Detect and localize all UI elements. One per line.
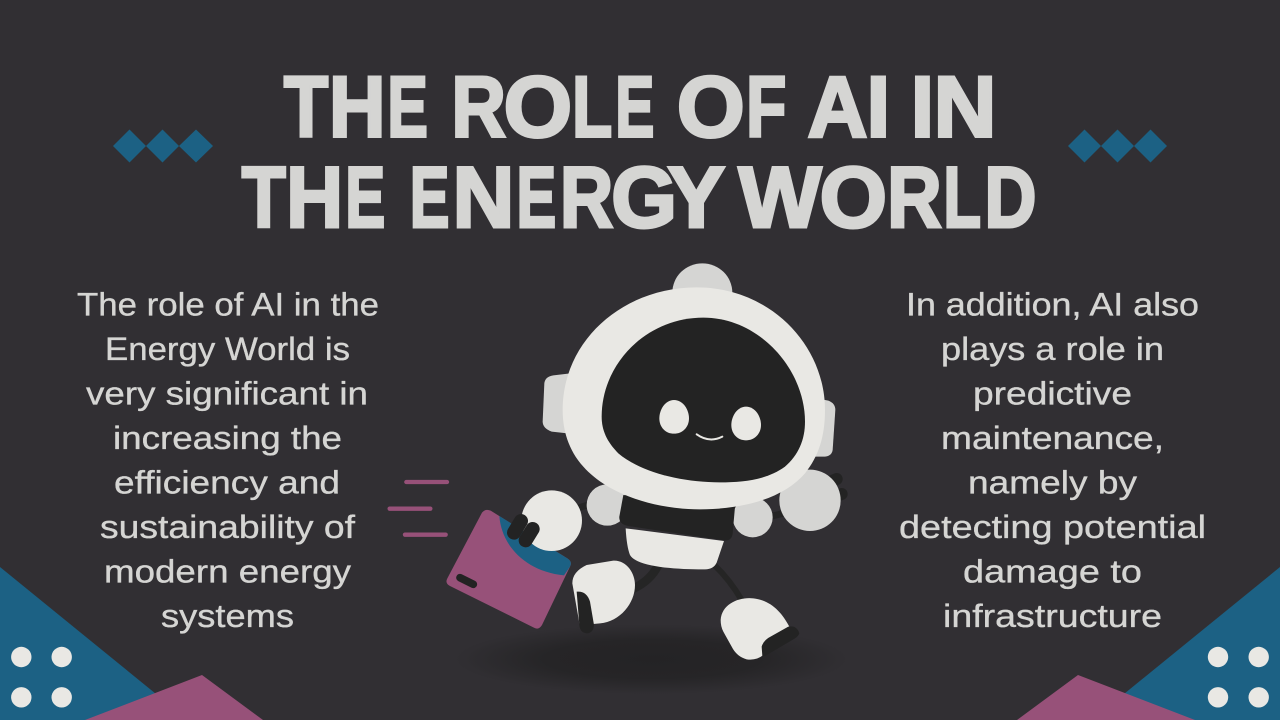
motion lines bbox=[390, 482, 447, 535]
right foot bbox=[721, 598, 799, 660]
title: H bbox=[329, 59, 386, 155]
text block: left: sustainability of bbox=[100, 509, 355, 545]
arm links bbox=[577, 503, 790, 517]
text block: right: In addition, AI also bbox=[906, 286, 1199, 322]
title: H bbox=[286, 150, 343, 246]
title: N bbox=[452, 150, 514, 246]
title: R bbox=[560, 150, 613, 246]
right hand bbox=[779, 470, 842, 531]
title: T bbox=[242, 150, 286, 246]
text block: right: damage to bbox=[963, 554, 1142, 590]
text block: left bbox=[77, 286, 379, 634]
title: R bbox=[887, 150, 942, 246]
belly bbox=[626, 528, 724, 569]
left foot bbox=[572, 561, 635, 633]
text block: left: increasing the bbox=[113, 420, 342, 456]
title: I bbox=[866, 59, 890, 155]
title: E bbox=[516, 150, 556, 246]
briefcase bbox=[446, 510, 571, 629]
icon: left diamonds bbox=[113, 130, 213, 162]
title: T bbox=[284, 59, 328, 155]
title bbox=[242, 59, 1036, 246]
text block: left: very significant in bbox=[86, 376, 368, 412]
text block: right: plays a role in bbox=[941, 331, 1164, 367]
left ear bbox=[543, 373, 577, 434]
text block: left: systems bbox=[161, 598, 294, 634]
title: Y bbox=[668, 150, 724, 246]
robot illustration bbox=[390, 263, 848, 694]
legs bbox=[632, 565, 742, 600]
head bbox=[563, 287, 825, 509]
ground shadow bbox=[455, 624, 848, 694]
title: E bbox=[345, 150, 385, 246]
title: E bbox=[387, 59, 428, 155]
antenna bbox=[672, 263, 732, 322]
smile bbox=[697, 434, 722, 440]
title: L bbox=[943, 150, 981, 246]
title: W bbox=[738, 150, 822, 246]
title: O bbox=[677, 59, 745, 155]
icon: right diamonds bbox=[1068, 130, 1167, 162]
title: N bbox=[934, 59, 996, 155]
text block: right: infrastructure bbox=[943, 598, 1162, 634]
text block: left: The role of AI in the bbox=[77, 286, 379, 322]
title: G bbox=[611, 150, 677, 246]
text block: right: detecting potential bbox=[899, 509, 1206, 545]
title: A bbox=[808, 59, 868, 155]
title: R bbox=[451, 59, 506, 155]
shoulders bbox=[587, 484, 773, 537]
title: F bbox=[746, 59, 786, 155]
title: L bbox=[572, 59, 612, 155]
torso bbox=[619, 495, 735, 540]
text block: right: maintenance, bbox=[941, 420, 1164, 456]
text block: right: predictive bbox=[973, 376, 1132, 412]
text block: left: Energy World is bbox=[105, 331, 350, 367]
title: D bbox=[984, 150, 1036, 246]
eyes bbox=[659, 400, 761, 440]
corner decoration: bottom left bbox=[0, 567, 263, 720]
text block: left: efficiency and bbox=[114, 464, 340, 500]
right ear bbox=[813, 398, 835, 457]
title: E bbox=[615, 59, 654, 155]
text block: left: modern energy bbox=[104, 554, 351, 590]
left hand bbox=[514, 490, 582, 551]
title: O bbox=[820, 150, 887, 246]
text block: right: namely by bbox=[968, 464, 1137, 500]
title: E bbox=[410, 150, 450, 246]
corner decoration: bottom right bbox=[1017, 567, 1280, 720]
title: O bbox=[504, 59, 572, 155]
text block: right bbox=[899, 286, 1206, 634]
face bbox=[602, 318, 805, 482]
title: I bbox=[911, 59, 934, 155]
